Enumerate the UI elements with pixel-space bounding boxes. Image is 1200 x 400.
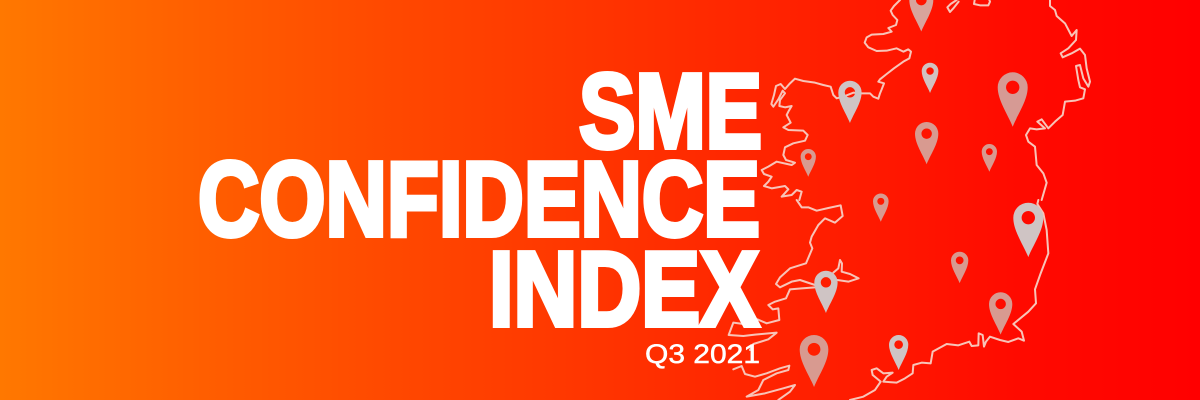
title line: INDEX: INDEX	[489, 230, 759, 348]
map: outline of Ireland	[729, 0, 1090, 400]
subtitle: Q3 2021: Q3 2021	[645, 339, 760, 369]
title	[198, 52, 762, 348]
pin: west	[801, 149, 816, 177]
pin: south east centre	[951, 252, 968, 283]
title line: SME: SME	[579, 52, 762, 170]
map pins	[800, 0, 1043, 387]
pin: Dublin large	[1013, 203, 1043, 257]
pin: south west large	[800, 335, 828, 387]
pin: east midlands	[982, 144, 997, 172]
pin: north west	[838, 81, 862, 123]
title line: CONFIDENCE: CONFIDENCE	[198, 140, 760, 258]
pin: far north	[909, 0, 933, 32]
pin: south east	[989, 292, 1012, 335]
pin: central west	[873, 194, 889, 222]
pin: Cork	[889, 335, 908, 370]
pin: north east large	[998, 72, 1028, 127]
pin: north centre	[922, 63, 938, 93]
pin: midlands	[915, 122, 938, 164]
pin: Shannon	[814, 271, 838, 313]
